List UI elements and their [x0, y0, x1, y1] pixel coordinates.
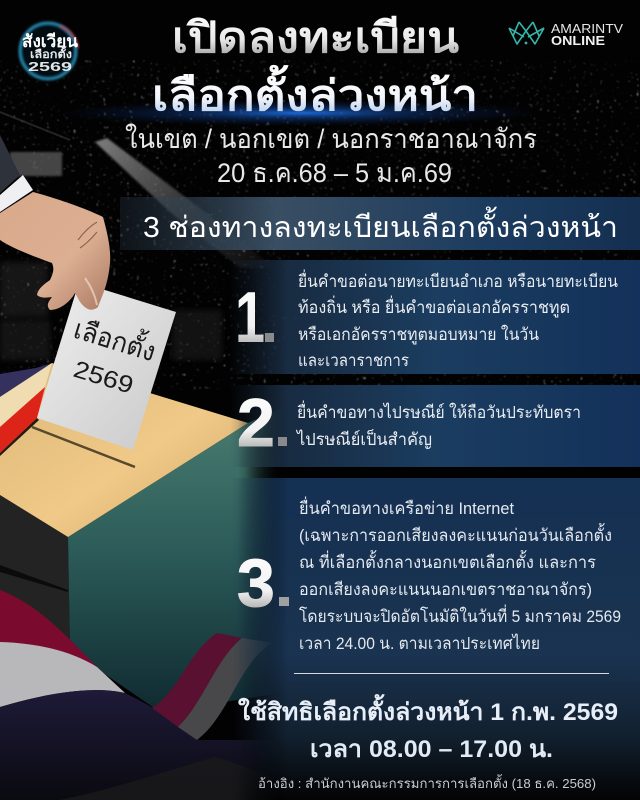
advance voting time: เวลา 08.00 – 17.00 น. [310, 736, 553, 763]
box top face [0, 363, 248, 537]
logo: Amarin TV Online: ONLINE [551, 34, 605, 48]
logo: election show badge: สังเวียน [22, 31, 78, 51]
channel 1 text: หรือเอกอัครราชทูตมอบหมาย ในวัน [298, 324, 539, 345]
channel 1 text: ท้องถิ่น หรือ ยื่นคำขอต่อเอกอัครราชทูต [298, 295, 570, 318]
number 3: 3 [237, 545, 275, 621]
channel 1 text [298, 269, 618, 370]
divider [294, 672, 609, 674]
black gaps between panels [245, 467, 640, 478]
thai flag illustration [0, 590, 267, 800]
panel: channel 2 background [230, 385, 640, 467]
paper label: เลือกตั้ง [70, 309, 161, 367]
purple back edge [0, 363, 52, 397]
logo: Amarin TV Online: AMARINTV [551, 22, 624, 36]
channel 3 text: ออกเสียงลงคะแนนนอกเขตราชอาณาจักร) [299, 580, 592, 599]
logo: election show badge [20, 23, 78, 79]
ballot box illustration [0, 363, 300, 712]
channel 2 text: ไปรษณีย์เป็นสำคัญ [295, 428, 432, 449]
hand holding ballot [0, 135, 110, 310]
number 1: 1 [235, 278, 265, 358]
advance voting date: ใช้สิทธิเลือกตั้งล่วงหน้า 1 ก.พ. 2569 [238, 693, 618, 726]
box right green face [68, 412, 274, 707]
ballot paper [37, 282, 176, 450]
cream flap [0, 363, 52, 427]
paper year: 2569 [70, 356, 136, 400]
box left dark face [0, 495, 70, 650]
number 2: 2 [237, 385, 275, 461]
channel 2 text [295, 400, 581, 449]
blue glow under title [60, 100, 540, 126]
channel 1 text: และเวลาราชการ [298, 351, 409, 370]
panel: heading band [120, 197, 640, 250]
subtitle: scope: ในเขต / นอกเขต / นอกราชอาณาจักร [125, 123, 537, 154]
channel 3 text: (เฉพาะการออกเสียงลงคะแนนก่อนวันเลือกตั้ง [299, 523, 612, 545]
logo: Amarin TV Online [509, 22, 624, 48]
subtitle: dates: 20 ธ.ค.68 – 5 ม.ค.69 [217, 158, 452, 188]
channel 1 text: ยื่นคำขอต่อนายทะเบียนอำเภอ หรือนายทะเบียน [298, 269, 618, 291]
channel 2 text: ยื่นคำขอทางไปรษณีย์ ให้ถือวันประทับตรา [297, 400, 581, 422]
channel 3 text: ยื่นคำขอทางเครือข่าย Internet [299, 496, 514, 518]
heading: three channels: 3 ช่องทางลงทะเบียนเลือกตั้งล่วงหน้า [143, 206, 618, 244]
panel: channel 1 background [230, 260, 640, 374]
logo: election show badge: เลือกตั้ง [30, 46, 72, 61]
logo: election show badge: 2569 [28, 59, 72, 74]
title line 1: เปิดลงทะเบียน [172, 14, 459, 61]
title line 2: เลือกตั้งล่วงหน้า [152, 64, 478, 119]
left face band [0, 565, 68, 592]
channel 3 text [299, 496, 621, 653]
red flap [0, 387, 45, 453]
panel: channel 3 and footer background [215, 478, 640, 800]
channel 3 text: เวลา 24.00 น. ตามเวลาประเทศไทย [299, 633, 540, 653]
crown icon [509, 22, 544, 44]
box slot [32, 427, 135, 467]
channel 3 text: ณ ที่เลือกตั้งกลางนอกเขตเลือกตั้ง และการ [299, 550, 596, 572]
source: อ้างอิง : สำนักงานคณะกรรมการการเลือกตั้ง (18 ธ.ค. 2568) [258, 774, 596, 791]
